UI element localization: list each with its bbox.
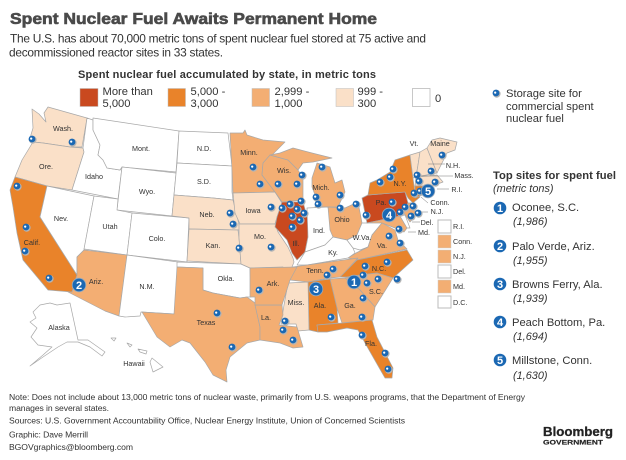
top sites list: 1 [497,203,503,215]
top sites list: (1,955) [513,255,548,267]
state labels: Conn. [430,198,450,207]
top sites list: Peach Bottom, Pa. [512,317,605,329]
state labels: S.C. [369,287,383,296]
legend: metric tons by state: 300 [358,98,376,110]
storage site key: Storage site for [506,88,582,100]
state labels: Tenn. [306,266,324,275]
state labels: Iowa [245,206,261,215]
numbered top-site markers on map [72,184,435,296]
state labels: Utah [102,222,118,231]
small state color key: D.C. [453,298,467,307]
small state color key: Conn. [453,237,472,246]
state labels: Mich. [312,183,330,192]
state labels: Ala. [314,301,326,310]
state labels: Ohio [334,215,350,224]
numbered top-site markers on map: 3 [313,284,319,296]
top sites list: 2 [497,241,503,253]
state labels: Ore. [39,162,53,171]
state labels: Va. [377,241,387,250]
state labels: Mo. [254,232,266,241]
state labels: Nev. [54,214,68,223]
small state color key: R.I. [453,222,464,231]
state labels: Hawaii [123,359,145,368]
state labels: N.J. [431,207,443,216]
state labels: S.D. [197,177,211,186]
top sites list: Palo Verde, Ariz. [512,241,595,253]
state labels: Okla. [218,274,234,283]
Bloomberg Government logo: Bloomberg [543,424,613,439]
legend: metric tons by state: 3,000 [190,98,218,110]
footnote and sources: manages in several states. [9,403,109,413]
legend: metric tons by state: 1,000 [274,98,302,110]
legend: metric tons by state: 999 - [358,86,383,98]
numbered top-site markers on map: 1 [351,277,357,289]
top sites list: 4 [497,317,504,329]
state labels: Minn. [240,148,258,157]
footnote and sources: Sources: U.S. Government Accountability Office, Nuclear Energy Institute, Union of Concerned Scientists [9,416,405,426]
state labels: Ariz. [89,277,103,286]
state labels: Wis. [277,166,291,175]
title: Spent Nuclear Fuel Awaits Permanent Home [10,11,377,28]
state labels: Idaho [85,172,103,181]
state labels: Colo. [149,234,165,243]
top sites list: Top sites for spent fuel [493,170,616,182]
legend: metric tons by state: 0 [435,93,441,105]
top sites list: (1,630) [513,370,548,382]
legend: metric tons by state: Spent nuclear fuel accumulated by state, in metric tons [78,69,376,81]
northeast leader lines [408,164,453,232]
state labels: Ky. [328,248,338,257]
state labels: Ark. [267,279,279,288]
state labels: Ga. [344,301,356,310]
footnote and sources: Note: Does not include about 13,000 metric tons of nuclear waste, primarily from U.S. weapons programs, that the Department of Energy [9,392,526,402]
state labels: N.H. [446,161,460,170]
legend: metric tons by state [78,69,441,110]
numbered top-site markers on map: 2 [76,280,82,292]
state labels: Md. [418,228,430,237]
footnote and sources: Graphic: Dave Merrill [9,430,88,440]
numbered top-site markers on map: 4 [386,210,393,222]
state labels: Ill. [292,239,300,248]
storage site key: nuclear fuel [506,113,564,125]
state labels: Wash. [53,124,73,133]
state labels: Vt. [410,139,418,148]
state labels: Del. [421,218,433,227]
legend: metric tons by state: 5,000 [102,98,130,110]
state labels: Calif. [24,238,40,247]
state labels: Mont. [132,144,150,153]
small state color key: N.J. [453,252,466,261]
top sites list: 3 [497,279,503,291]
footnote and sources [9,392,526,452]
top sites list: (1,694) [513,331,548,343]
state labels: Fla. [365,339,377,348]
state labels: R.I. [451,185,463,194]
state labels [24,124,474,368]
storage site key [493,88,595,125]
map of U.S. states [10,107,457,382]
Bloomberg Government logo [543,424,613,446]
legend: metric tons by state: More than [102,86,153,98]
top sites list [493,170,616,382]
state labels: La. [261,313,271,322]
state labels: N.M. [139,282,155,291]
top sites list: Millstone, Conn. [512,355,592,367]
state labels: Kan. [206,241,220,250]
top sites list: (1,939) [513,293,548,305]
state labels: W.Va. [353,233,371,242]
state labels: Texas [197,318,216,327]
subtitle: The U.S. has about 70,000 metric tons of spent nuclear fuel stored at 75 active and [10,32,426,46]
state labels: Ind. [313,226,325,235]
state labels: Maine [430,139,450,148]
Bloomberg Government logo: GOVERNMENT [543,440,603,446]
small state color key [438,220,472,308]
legend: metric tons by state: 5,000 - [190,86,226,98]
small state color key: Del. [453,267,466,276]
footnote and sources: BGOVgraphics@bloomberg.com [9,442,133,452]
top sites list: (metric tons) [493,183,554,195]
numbered top-site markers on map: 5 [425,186,431,198]
storage site key: commercial spent [506,101,595,113]
state labels: Pa. [376,198,386,207]
top sites list: 5 [497,355,503,367]
top sites list: Browns Ferry, Ala. [512,279,603,291]
state labels: Miss. [288,298,304,307]
top sites list: (1,986) [513,216,548,228]
state labels: N.D. [197,144,211,153]
subtitle: decommissioned reactor sites in 33 states. [9,46,223,60]
state labels: Mass. [454,171,474,180]
top sites list: Oconee, S.C. [512,202,579,214]
storage site markers [14,136,447,374]
legend: metric tons by state: 2,999 - [274,86,310,98]
state labels: Wyo. [139,187,155,196]
state labels: Neb. [199,210,215,219]
state labels: Alaska [48,323,70,332]
small state color key: Md. [453,282,465,291]
subtitle [9,32,426,60]
state labels: N.C. [372,264,386,273]
state labels: N.Y. [393,179,407,188]
